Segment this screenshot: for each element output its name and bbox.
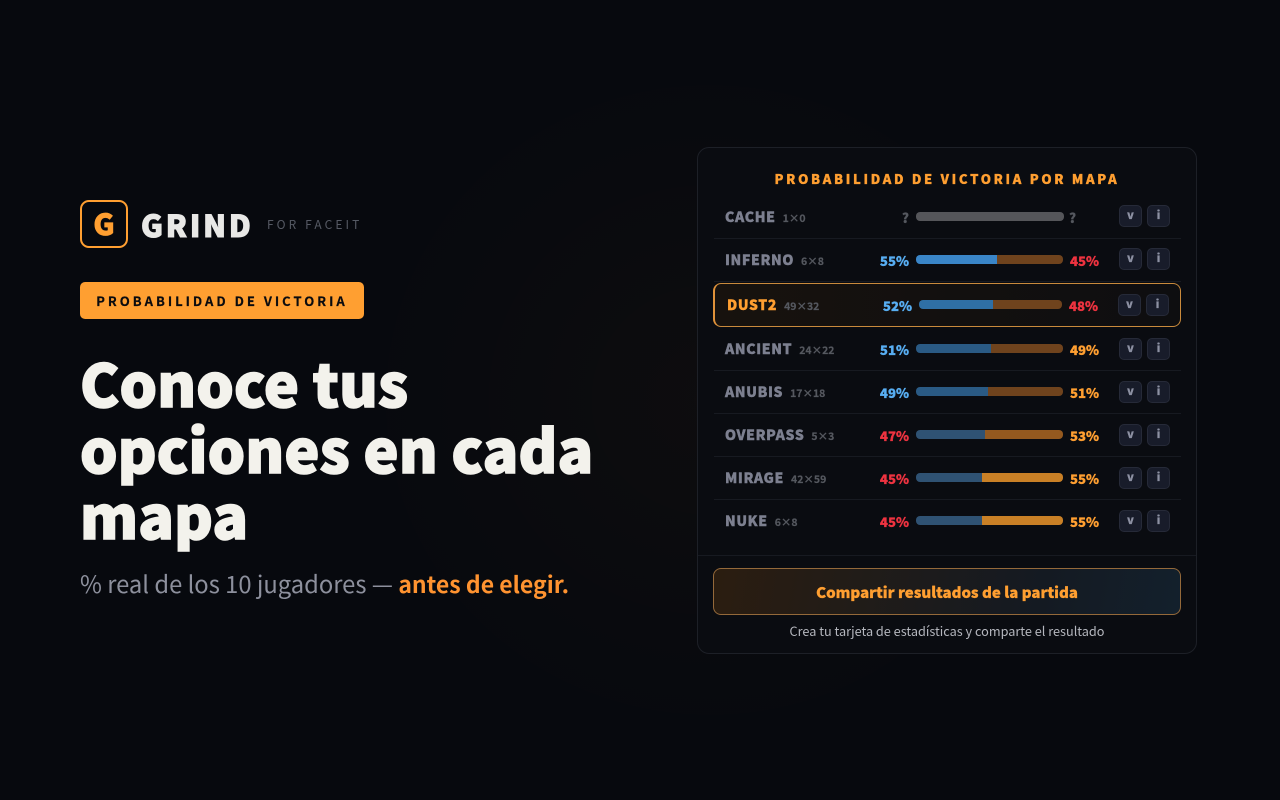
share button: Compartir resultados de la partida <box>816 582 1078 603</box>
row: Dust2 (highlighted): 48% <box>1069 296 1098 315</box>
row: Dust2 (highlighted): i <box>1156 296 1159 312</box>
row: Overpass: i <box>1157 426 1160 442</box>
row: Cache: ? <box>1069 208 1076 226</box>
row: Inferno: 55% <box>880 250 909 270</box>
row: Cache: ? <box>902 208 909 226</box>
row: Overpass: 47% <box>880 426 909 444</box>
row: Anubis: 49% <box>880 382 909 402</box>
row: Inferno: v <box>1127 250 1134 266</box>
row: Nuke: v <box>1127 512 1134 528</box>
row: Anubis: 51% <box>1070 382 1099 402</box>
row: Ancient <box>724 338 1170 360</box>
row: Cache: v <box>1127 207 1134 223</box>
row: Dust2 (highlighted) <box>713 283 1181 327</box>
share caption: Crea tu tarjeta de estadísticas y comparte el resultado <box>790 621 1104 640</box>
row: Nuke: 45% <box>880 512 909 530</box>
heading: Conoce tus <box>80 339 408 424</box>
share button <box>713 568 1181 615</box>
row: Dust2 (highlighted): v <box>1126 296 1133 312</box>
panel title: PROBABILIDAD DE VICTORIA POR MAPA <box>775 169 1119 188</box>
row: Nuke: 55% <box>1070 512 1099 530</box>
row: Ancient: v <box>1127 340 1134 356</box>
row: Inferno: 45% <box>1070 250 1099 270</box>
badge: probabilidad de victoria: PROBABILIDAD DE VICTORIA <box>96 291 348 310</box>
row: Inferno: INFERNO 6×8 <box>725 250 824 270</box>
heading: opciones en cada <box>80 405 593 490</box>
row: Anubis: i <box>1157 383 1160 399</box>
row: Overpass <box>725 424 1170 446</box>
wordmark: GRIND <box>141 202 254 246</box>
row: Cache: i <box>1157 207 1160 223</box>
row: Ancient: ANCIENT 24×22 <box>725 339 834 359</box>
icon: G badge <box>80 200 128 248</box>
row: Anubis <box>724 381 1170 403</box>
row: Inferno <box>725 248 1170 270</box>
row: Overpass: v <box>1127 426 1134 442</box>
row: Nuke <box>725 510 1170 532</box>
row: Nuke: i <box>1157 512 1160 528</box>
panel: map win probability <box>697 147 1197 654</box>
row: Inferno: i <box>1157 250 1160 266</box>
row: Nuke: NUKE 6×8 <box>725 511 798 531</box>
logo: Grind for Faceit <box>80 200 362 248</box>
heading <box>80 339 593 556</box>
subtitle: % real de los 10 jugadores — antes de elegir. <box>80 565 569 600</box>
row: Cache <box>725 205 1170 227</box>
row: Ancient: 49% <box>1070 340 1099 358</box>
icon: G badge: G <box>93 202 115 244</box>
row: Mirage: 55% <box>1070 468 1099 488</box>
row: Anubis: v <box>1127 383 1134 399</box>
badge: probabilidad de victoria <box>80 282 364 319</box>
row: Mirage: v <box>1127 469 1134 485</box>
row: Cache: CACHE 1×0 <box>725 207 806 227</box>
row: Ancient: i <box>1157 340 1160 356</box>
row: Mirage: i <box>1157 469 1160 485</box>
row: Mirage: MIRAGE 42×59 <box>725 468 826 488</box>
row: Overpass: OVERPASS 5×3 <box>725 425 834 445</box>
row: Mirage: 45% <box>880 468 909 488</box>
row: Ancient: 51% <box>880 340 909 358</box>
row: Dust2 (highlighted): 52% <box>883 296 912 315</box>
tagline: FOR FACEIT <box>267 216 362 233</box>
heading: mapa <box>80 471 248 556</box>
row: Dust2 (highlighted): DUST2 49×32 <box>727 295 819 315</box>
row: Mirage <box>725 467 1170 489</box>
row: Anubis: ANUBIS 17×18 <box>725 382 825 402</box>
row: Overpass: 53% <box>1070 426 1099 444</box>
